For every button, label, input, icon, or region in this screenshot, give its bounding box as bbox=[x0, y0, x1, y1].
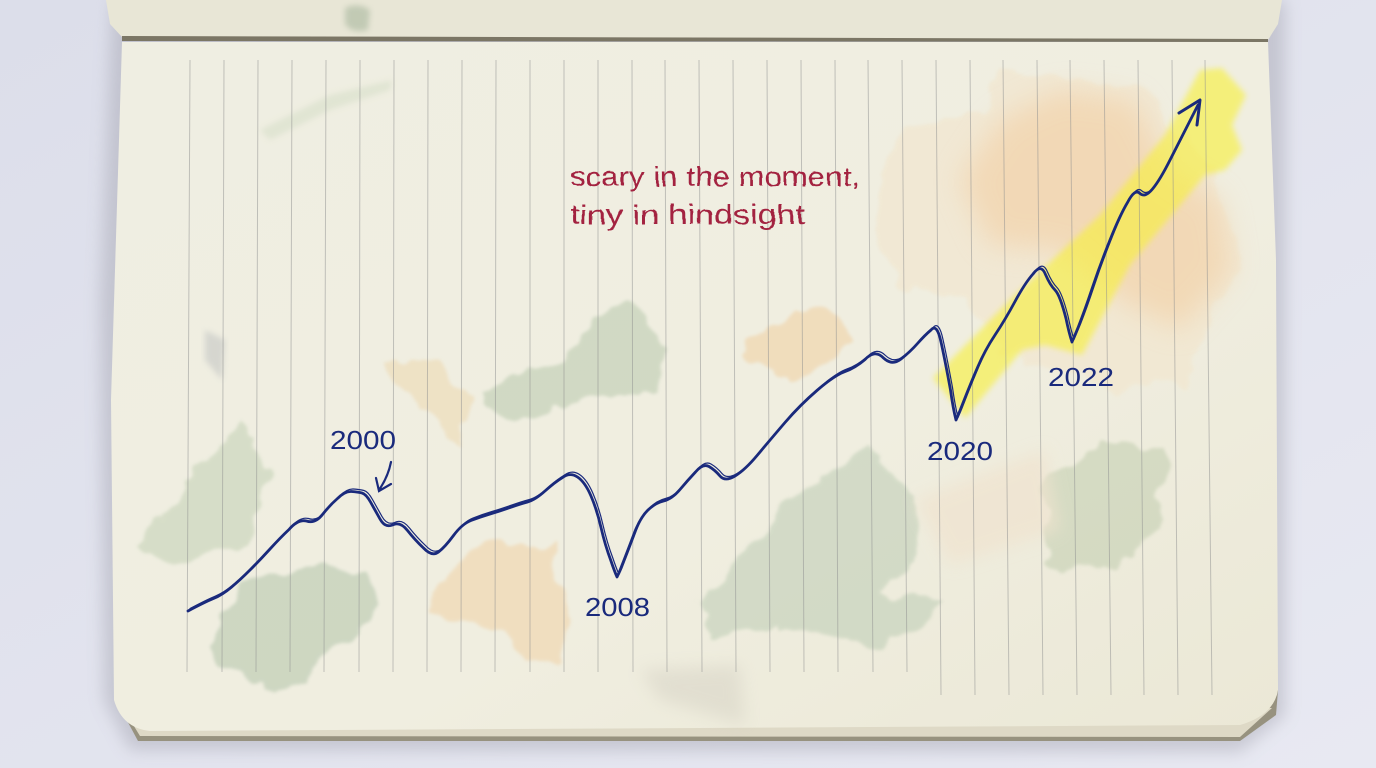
label: 2022: 2022 bbox=[1048, 362, 1114, 392]
top facing page bbox=[106, 0, 1282, 42]
watercolor: orange and yellow wash top right bbox=[870, 72, 1240, 395]
label: 2000 with arrow bbox=[330, 425, 396, 491]
chart line with arrow bbox=[188, 100, 1200, 611]
main notebook page bbox=[111, 42, 1278, 731]
label: 2000 with arrow: 2000 bbox=[330, 425, 396, 455]
ruled vertical lines bbox=[187, 60, 1212, 695]
annotation: scary in the moment, tiny in hindsight: scary in the moment, bbox=[570, 161, 860, 192]
label: 2020: 2020 bbox=[927, 436, 993, 466]
annotation: scary in the moment, tiny in hindsight: tiny in hindsight bbox=[570, 199, 805, 230]
annotation: scary in the moment, tiny in hindsight bbox=[570, 161, 860, 230]
highlighter stroke bbox=[933, 68, 1246, 418]
watercolor: green and orange blobs bbox=[140, 80, 1165, 725]
page edge stack bbox=[116, 690, 1278, 741]
label: 2008: 2008 bbox=[585, 592, 650, 622]
